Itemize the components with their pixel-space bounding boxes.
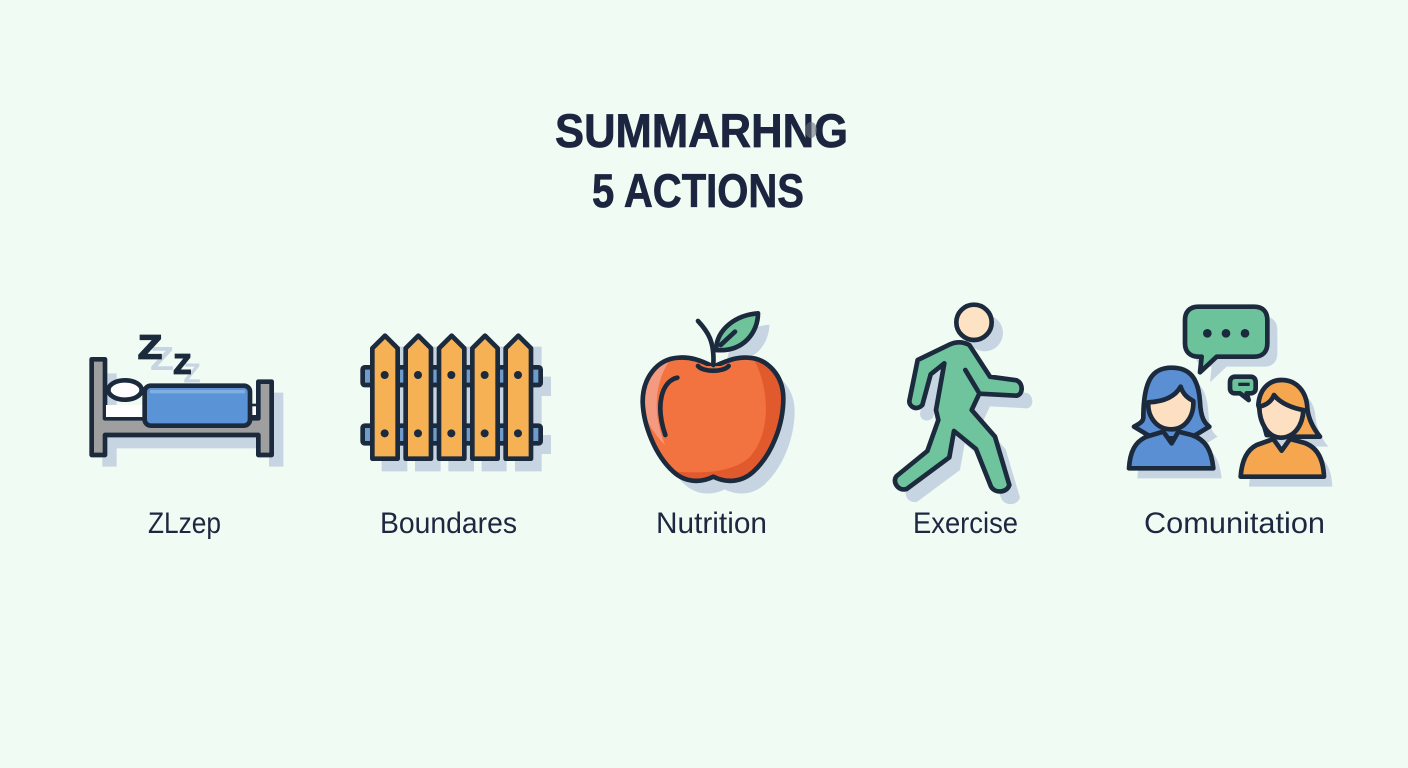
- title: 5 ACTIONS: [592, 164, 804, 217]
- icon: running figure: [895, 305, 1032, 504]
- label: communication: Comunitation: [1144, 507, 1325, 540]
- icon: bed with sleeping Zs: [92, 329, 283, 467]
- title: [555, 104, 848, 217]
- small speech bubble: [1230, 377, 1256, 400]
- label: nutrition: Nutrition: [656, 507, 767, 540]
- person: orange: [1241, 380, 1324, 477]
- large speech bubble: [1185, 307, 1267, 372]
- person: blue: [1129, 368, 1213, 468]
- icon: bed with sleeping Zs: Z: [138, 329, 162, 366]
- icon: bed with sleeping Zs: Z: [150, 341, 174, 378]
- label: sleep: ZLzep: [148, 507, 221, 540]
- icon: apple: [640, 313, 795, 494]
- label: exercise: Exercise: [913, 507, 1018, 540]
- icon: bed with sleeping Zs: Z: [174, 348, 191, 379]
- icon: fence: [363, 336, 551, 471]
- icon: two people talking: [1129, 307, 1332, 487]
- label: boundaries: Boundares: [380, 507, 517, 540]
- title: SUMMARHNG: [555, 104, 848, 157]
- icon: bed with sleeping Zs: Z: [183, 358, 201, 389]
